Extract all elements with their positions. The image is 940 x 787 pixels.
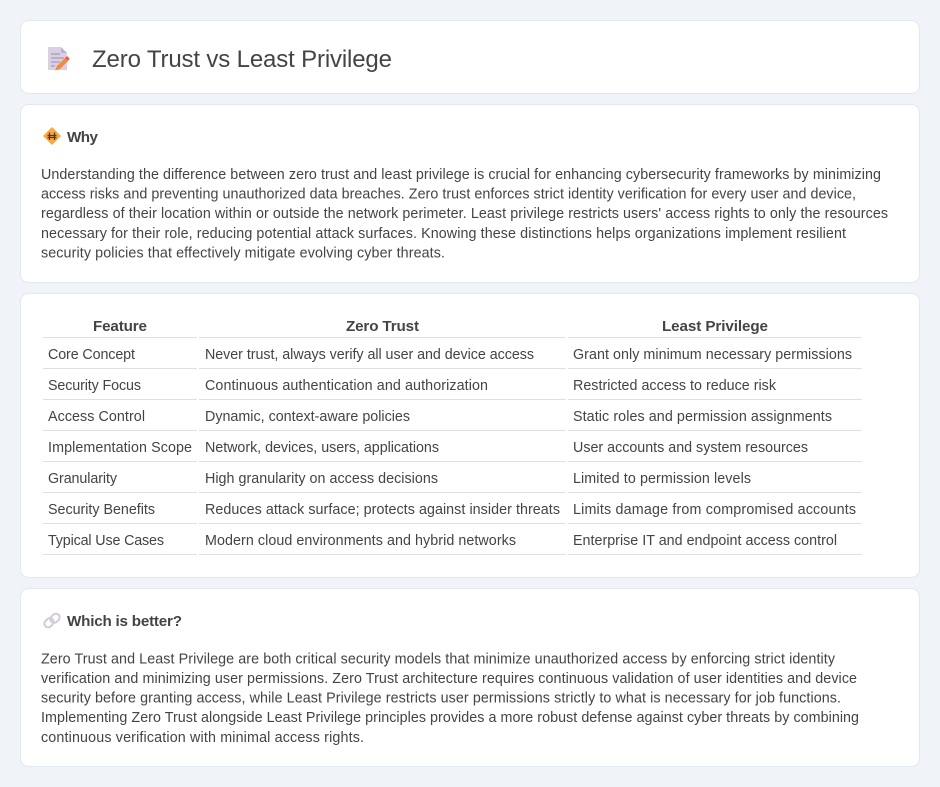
table row: access control: Static roles and permission assignments bbox=[573, 409, 832, 425]
table row: implementation scope: Implementation Scope bbox=[48, 440, 192, 456]
table row: typical use cases: Modern cloud environments and hybrid networks bbox=[205, 533, 516, 549]
text block: why paragraph: Understanding the difference between zero trust and least privilege is crucial for enhancing cybersecurity frameworks by minimizing bbox=[41, 167, 881, 183]
table row: security focus: Restricted access to reduce risk bbox=[573, 378, 777, 394]
table row: access control: Dynamic, context-aware policies bbox=[205, 409, 410, 425]
table row: security benefits: Reduces attack surface; protects against insider threats bbox=[205, 502, 560, 518]
table row: implementation scope: Network, devices, users, applications bbox=[205, 440, 439, 456]
table row: core concept: Core Concept bbox=[48, 347, 135, 363]
table row: security benefits: Security Benefits bbox=[48, 502, 155, 518]
text block: why paragraph: regardless of their location within or outside the network perimeter. Least privilege restricts users' access rights to only the resources bbox=[41, 206, 888, 222]
table row: security benefits bbox=[43, 502, 862, 524]
text block: why paragraph bbox=[41, 167, 888, 261]
table row: security focus: Security Focus bbox=[48, 378, 141, 394]
panel: comparison table bbox=[20, 294, 920, 578]
table row: security focus bbox=[43, 378, 862, 400]
text block: which paragraph: security before granting access, while Least Privilege restricts user permissions strictly to what is necessary for job functions. bbox=[41, 691, 841, 707]
table header row: Feature bbox=[93, 318, 147, 335]
table header row: Least Privilege bbox=[662, 318, 768, 335]
text block: which paragraph: Implementing Zero Trust alongside Least Privilege principles provides a more robust defense against cyber threats by combining bbox=[41, 710, 859, 726]
text block: why paragraph: security policies that effectively mitigate evolving cyber threats. bbox=[41, 245, 445, 261]
table row: implementation scope bbox=[43, 440, 862, 462]
table row: typical use cases: Enterprise IT and endpoint access control bbox=[573, 533, 837, 549]
text block: why paragraph: necessary for their role, reducing potential attack surfaces. Knowing these distinctions helps organizations implement resilient bbox=[41, 226, 846, 242]
table row: security focus: Continuous authentication and authorization bbox=[205, 378, 488, 394]
text block: which paragraph: Zero Trust and Least Privilege are both critical security models that minimize unauthorized access by enforcing strict identity bbox=[41, 651, 836, 667]
table row: core concept: Never trust, always verify all user and device access bbox=[205, 347, 534, 363]
table header row: Zero Trust bbox=[346, 318, 419, 335]
panel: title header bbox=[20, 20, 920, 94]
table row: typical use cases bbox=[43, 533, 862, 555]
title: Zero Trust vs Least Privilege bbox=[92, 46, 392, 73]
table row: implementation scope: User accounts and system resources bbox=[573, 440, 808, 456]
table row: granularity: Granularity bbox=[48, 471, 118, 487]
table row: security benefits: Limits damage from compromised accounts bbox=[573, 502, 856, 518]
text block: which paragraph: verification and minimizing user permissions. Zero Trust architecture requires continuous validation of user identities and device bbox=[41, 671, 857, 687]
heading: which is better: Which is better? bbox=[67, 613, 182, 630]
table row: core concept: Grant only minimum necessary permissions bbox=[573, 347, 852, 363]
panel: which is better bbox=[20, 588, 920, 766]
table header row bbox=[43, 318, 862, 338]
table row: granularity bbox=[43, 471, 862, 493]
table row: typical use cases: Typical Use Cases bbox=[48, 533, 164, 549]
icon: memo with pencil bbox=[48, 47, 70, 70]
panel: why bbox=[20, 104, 920, 282]
text block: why paragraph: access risks and preventing unauthorized data breaches. Zero trust enforces strict identity verification for every user and device, bbox=[41, 187, 856, 203]
table row: access control: Access Control bbox=[48, 409, 145, 425]
icon: link bbox=[43, 612, 61, 629]
table row: access control bbox=[43, 409, 862, 431]
table row: core concept bbox=[43, 347, 862, 369]
heading: why: Why bbox=[67, 129, 99, 146]
text block: which paragraph: continuous verification with minimal access rights. bbox=[41, 730, 364, 746]
icon: orange diamond bbox=[44, 128, 60, 144]
text block: which paragraph bbox=[41, 651, 859, 746]
table row: granularity: High granularity on access decisions bbox=[205, 471, 438, 487]
table row: granularity: Limited to permission levels bbox=[573, 471, 751, 487]
